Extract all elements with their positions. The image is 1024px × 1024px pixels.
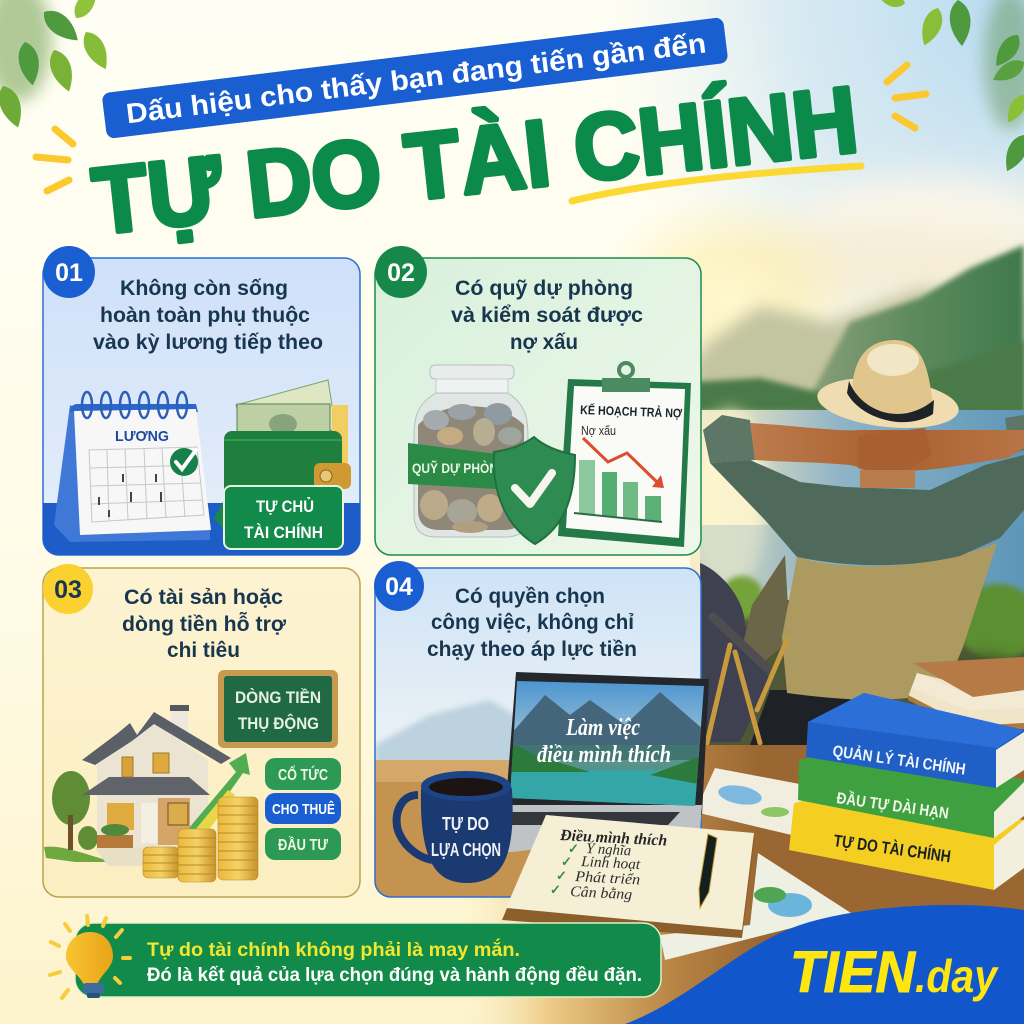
photo: man relaxing on chair xyxy=(700,340,1024,745)
icon: clipboard repayment plan xyxy=(558,363,691,547)
foliage: top right leaves xyxy=(879,0,1024,175)
number badge 03 xyxy=(43,564,93,614)
sign: dòng tiền thụ động: THỤ ĐỘNG xyxy=(238,714,319,733)
accent ticks left of title xyxy=(36,129,73,191)
book: tự do tài chính (yellow): TỰ DO TÀI CHÍNH xyxy=(832,831,952,866)
icon: shield with check xyxy=(494,437,575,544)
illustration: rising arrow xyxy=(189,753,250,835)
pill: cho thuê: CHO THUÊ xyxy=(272,800,335,818)
label: tự chủ tài chính: TỰ CHỦ xyxy=(256,497,314,516)
illustration: house and tree xyxy=(44,705,231,866)
table top xyxy=(460,745,1024,1024)
straw hat xyxy=(815,340,961,434)
icon: laptop: điều mình thích xyxy=(537,742,671,768)
notebook with handwritten list xyxy=(502,815,755,938)
label: tự chủ tài chính xyxy=(214,486,343,549)
heading 02: và kiểm soát được xyxy=(451,304,643,327)
number badge 03: 03 xyxy=(54,576,82,604)
chair frame xyxy=(707,617,787,743)
bottom banner message xyxy=(75,923,661,997)
icon: wallet with cash xyxy=(224,380,351,526)
icon: mug: TỰ DO xyxy=(442,814,489,834)
notebook with handwritten list: ✓ xyxy=(556,868,567,883)
trousers and leg xyxy=(700,555,850,745)
book: tan books on top xyxy=(908,657,1024,731)
book: quản lý tài chính (blue) xyxy=(806,693,1024,788)
notebook with handwritten list: Ý nghĩa xyxy=(586,840,632,859)
icon: clipboard repayment plan: Nợ xấu xyxy=(581,423,616,438)
book: đầu tư dài hạn (green): ĐẦU TỰ DÀI HẠN xyxy=(835,788,950,823)
heading 03: dòng tiền hỗ trợ xyxy=(122,612,286,636)
chair back xyxy=(782,543,997,700)
icon: coin jar: QUỸ DỰ PHÒN xyxy=(412,459,498,476)
pill: cho thuê xyxy=(265,793,341,824)
notebook with handwritten list: ✓ xyxy=(550,882,561,897)
number badge 01 xyxy=(43,246,95,298)
notebook with handwritten list: Phát triển xyxy=(574,869,641,888)
heading 02: nợ xấu xyxy=(510,331,578,354)
logo corner: TIEN.day: TIEN xyxy=(790,940,916,1005)
card 04 xyxy=(374,561,709,900)
icon: mug xyxy=(397,771,513,883)
blue floor xyxy=(43,503,360,555)
notebook with handwritten list: Điều mình thích xyxy=(559,827,668,850)
number badge 01: 01 xyxy=(55,259,83,287)
pill: cổ tức: CỔ TỨC xyxy=(278,766,328,784)
sign: dòng tiền thụ động: DÒNG TIỀN xyxy=(235,688,321,707)
shirt body xyxy=(710,455,1024,565)
bottom banner message: Tự do tài chính không phải là may mắn. xyxy=(147,937,520,961)
sleeve cuffs xyxy=(703,415,1024,463)
heading 04 xyxy=(427,585,637,661)
icon: desk calendar xyxy=(54,392,211,542)
number badge 04: 04 xyxy=(385,573,413,601)
illustration: gold coin stacks xyxy=(143,797,258,882)
pill: cổ tức xyxy=(265,758,341,790)
heading 04: Có quyền chọn xyxy=(455,585,605,608)
icon: coin jar xyxy=(408,365,528,537)
title underline xyxy=(572,166,861,201)
notebook with handwritten list: ✓ xyxy=(561,854,572,869)
card 03 xyxy=(43,564,360,897)
heading 03: chi tiêu xyxy=(167,639,240,662)
notebook with handwritten list: ✓ xyxy=(568,841,579,856)
notebook with handwritten list: Linh hoạt xyxy=(580,854,641,873)
heading 02 xyxy=(451,277,643,354)
pill: đầu tư xyxy=(265,828,341,860)
bushes behind chair xyxy=(720,576,1024,745)
heading 01: hoàn toàn phụ thuộc xyxy=(100,304,310,327)
number badge 02 xyxy=(375,246,427,298)
icon: pen xyxy=(699,834,717,908)
icon: laptop: Làm việc xyxy=(565,715,640,741)
foliage: top left leaves xyxy=(0,0,114,131)
arms and hands xyxy=(750,423,1024,488)
map on table: lower xyxy=(660,853,851,960)
card 02 xyxy=(375,246,701,555)
book: tự do tài chính (yellow) xyxy=(789,790,1024,890)
accent ticks right of title xyxy=(887,65,926,128)
icon: light bulb xyxy=(50,916,130,998)
heading 03 xyxy=(122,586,286,662)
card 01 xyxy=(43,246,360,555)
icon: clipboard repayment plan: KẾ HOẠCH TRẢ NỢ xyxy=(580,402,683,421)
number badge 02: 02 xyxy=(387,259,415,287)
label: tự chủ tài chính: TÀI CHÍNH xyxy=(244,523,323,542)
bottom banner message: Đó là kết quả của lựa chọn đúng và hành động đều đặn. xyxy=(147,964,642,986)
heading 01: vào kỳ lương tiếp theo xyxy=(93,331,323,354)
logo corner: TIEN.day: .day xyxy=(915,950,999,1002)
stack of books xyxy=(789,657,1024,890)
icon: mug: LỰA CHỌN xyxy=(431,840,501,860)
sign: dòng tiền thụ động xyxy=(218,670,338,748)
heading 01: Không còn sống xyxy=(120,277,288,300)
main title: TỰ DO TÀI CHÍNH xyxy=(88,67,863,254)
notebook with handwritten list: Cân bằng xyxy=(570,884,633,903)
subtitle pill: Dấu hiệu cho thấy bạn đang tiến gần đến xyxy=(124,27,708,129)
scene: distant hills and wooden desk xyxy=(375,700,705,900)
heading 04: công việc, không chỉ xyxy=(431,611,634,634)
icon: laptop xyxy=(498,672,709,852)
number badge 04 xyxy=(374,561,424,611)
book: quản lý tài chính (blue): QUẢN LÝ TÀI CHÍNH xyxy=(831,741,967,779)
heading 01 xyxy=(93,277,323,354)
heading 04: chạy theo áp lực tiền xyxy=(427,638,637,661)
pill: đầu tư: ĐẦU TƯ xyxy=(278,837,328,854)
logo corner: TIEN.day xyxy=(625,905,1024,1024)
map on table: upper xyxy=(695,768,805,837)
heading 02: Có quỹ dự phòng xyxy=(455,277,633,300)
icon: desk calendar: LƯƠNG xyxy=(115,428,169,445)
book: đầu tư dài hạn (green) xyxy=(798,745,1024,838)
heading 03: Có tài sản hoặc xyxy=(124,586,283,609)
subtitle pill xyxy=(102,17,728,139)
